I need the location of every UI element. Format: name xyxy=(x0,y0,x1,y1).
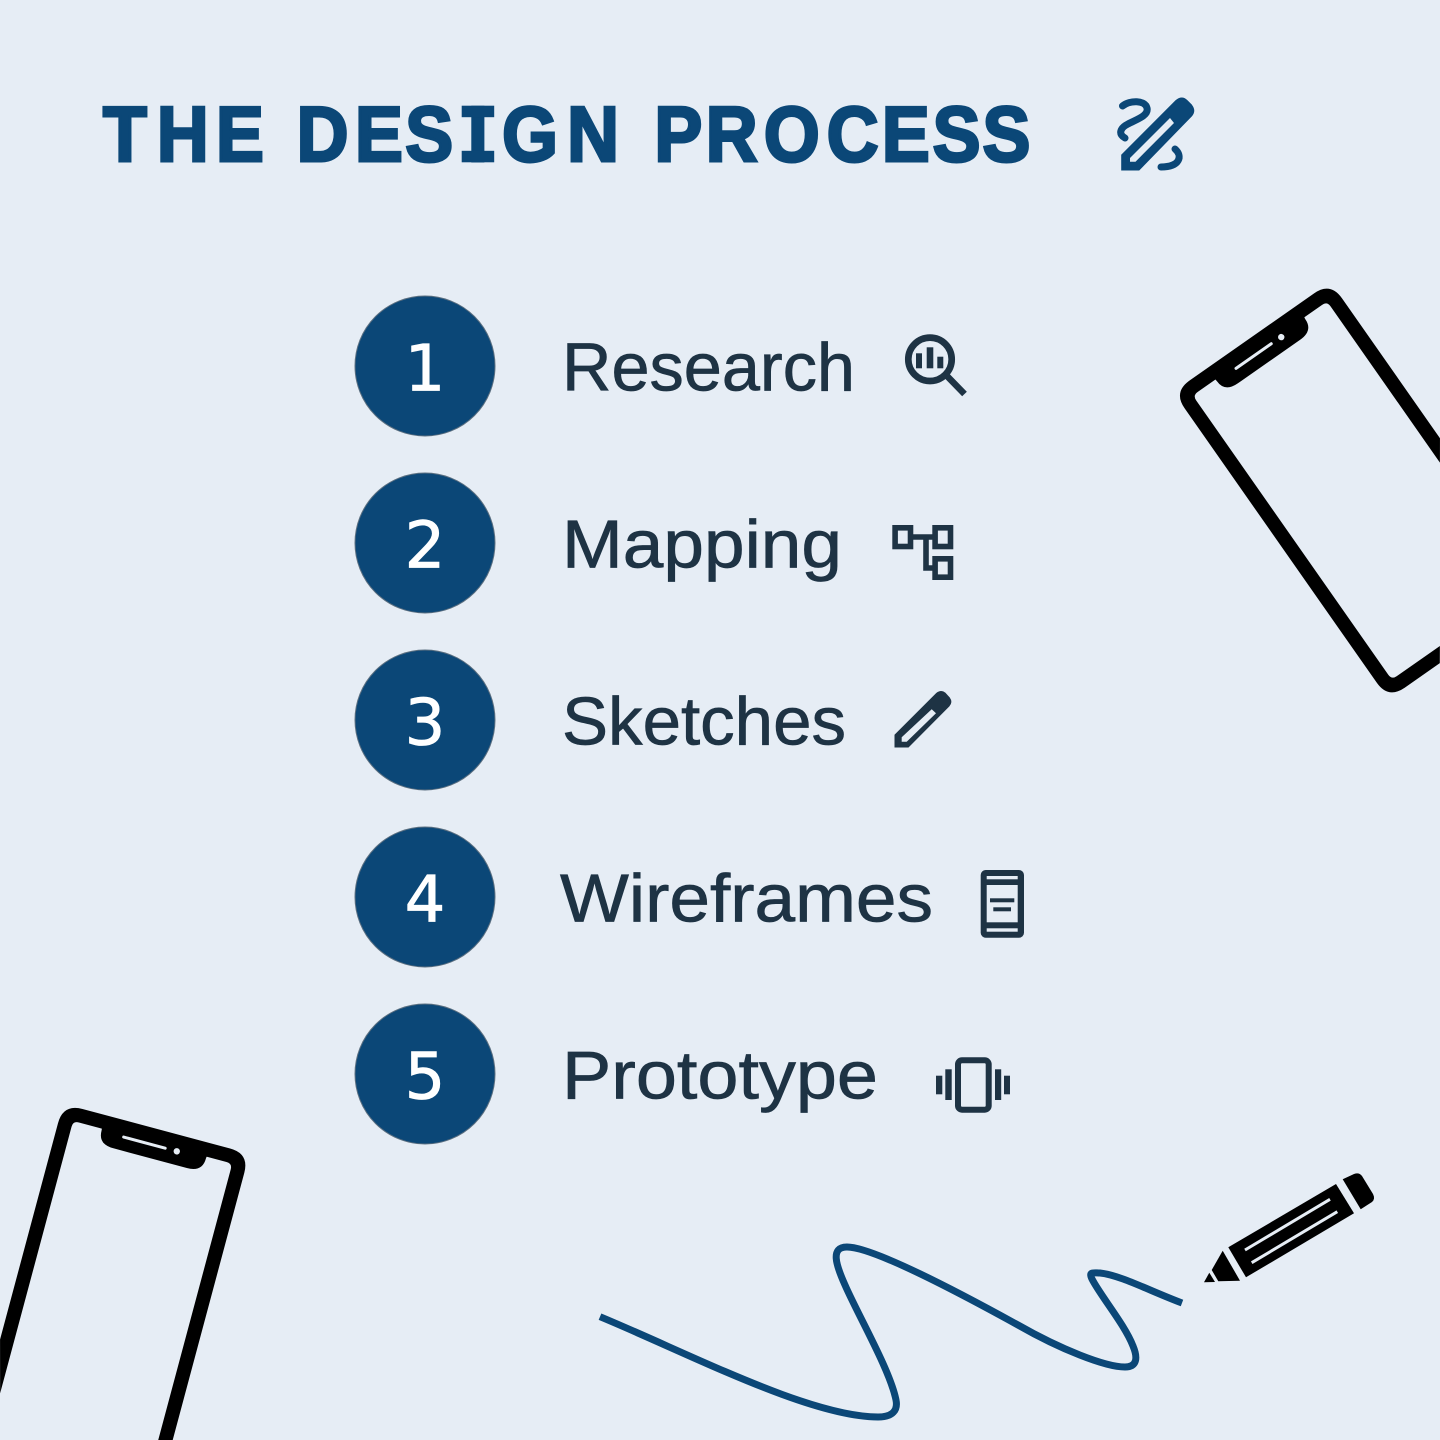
number badge 2 xyxy=(355,473,495,613)
step 5: prototype xyxy=(355,1004,1010,1144)
number badge 1 xyxy=(355,296,495,436)
icon: pen with squiggles xyxy=(1121,98,1194,170)
label: Mapping: Mapping xyxy=(562,506,842,582)
phone outline: bottom left xyxy=(0,1104,249,1440)
number badge 5 xyxy=(355,1004,495,1144)
number badge 2: 2 xyxy=(405,510,445,584)
number badge 3 xyxy=(355,650,495,790)
icon: pencil xyxy=(895,692,951,747)
phone outline: top right xyxy=(1173,282,1440,699)
step 2: mapping xyxy=(355,473,950,613)
icon: wireframe phone xyxy=(981,870,1024,938)
number badge 1: 1 xyxy=(405,333,445,407)
icon: flow chart xyxy=(895,528,950,577)
icon: vibrating phone xyxy=(936,1060,1010,1110)
number badge 4 xyxy=(355,827,495,967)
number badge 3: 3 xyxy=(405,686,445,760)
squiggle line xyxy=(600,1247,1182,1417)
step 4: wireframes xyxy=(355,827,1024,967)
label: Wireframes: Wireframes xyxy=(560,860,933,936)
number badge 5: 5 xyxy=(405,1040,445,1114)
number badge 4: 4 xyxy=(405,864,445,938)
step 1: research xyxy=(355,296,964,436)
label: Prototype: Prototype xyxy=(562,1038,878,1114)
pencil drawing the line xyxy=(1204,1173,1374,1282)
icon: magnifier with bars xyxy=(908,338,964,394)
title: THE DESIGN PROCESS xyxy=(103,90,1030,177)
label: Sketches: Sketches xyxy=(562,684,846,760)
step 3: sketches xyxy=(355,650,951,790)
label: Research: Research xyxy=(562,330,855,406)
